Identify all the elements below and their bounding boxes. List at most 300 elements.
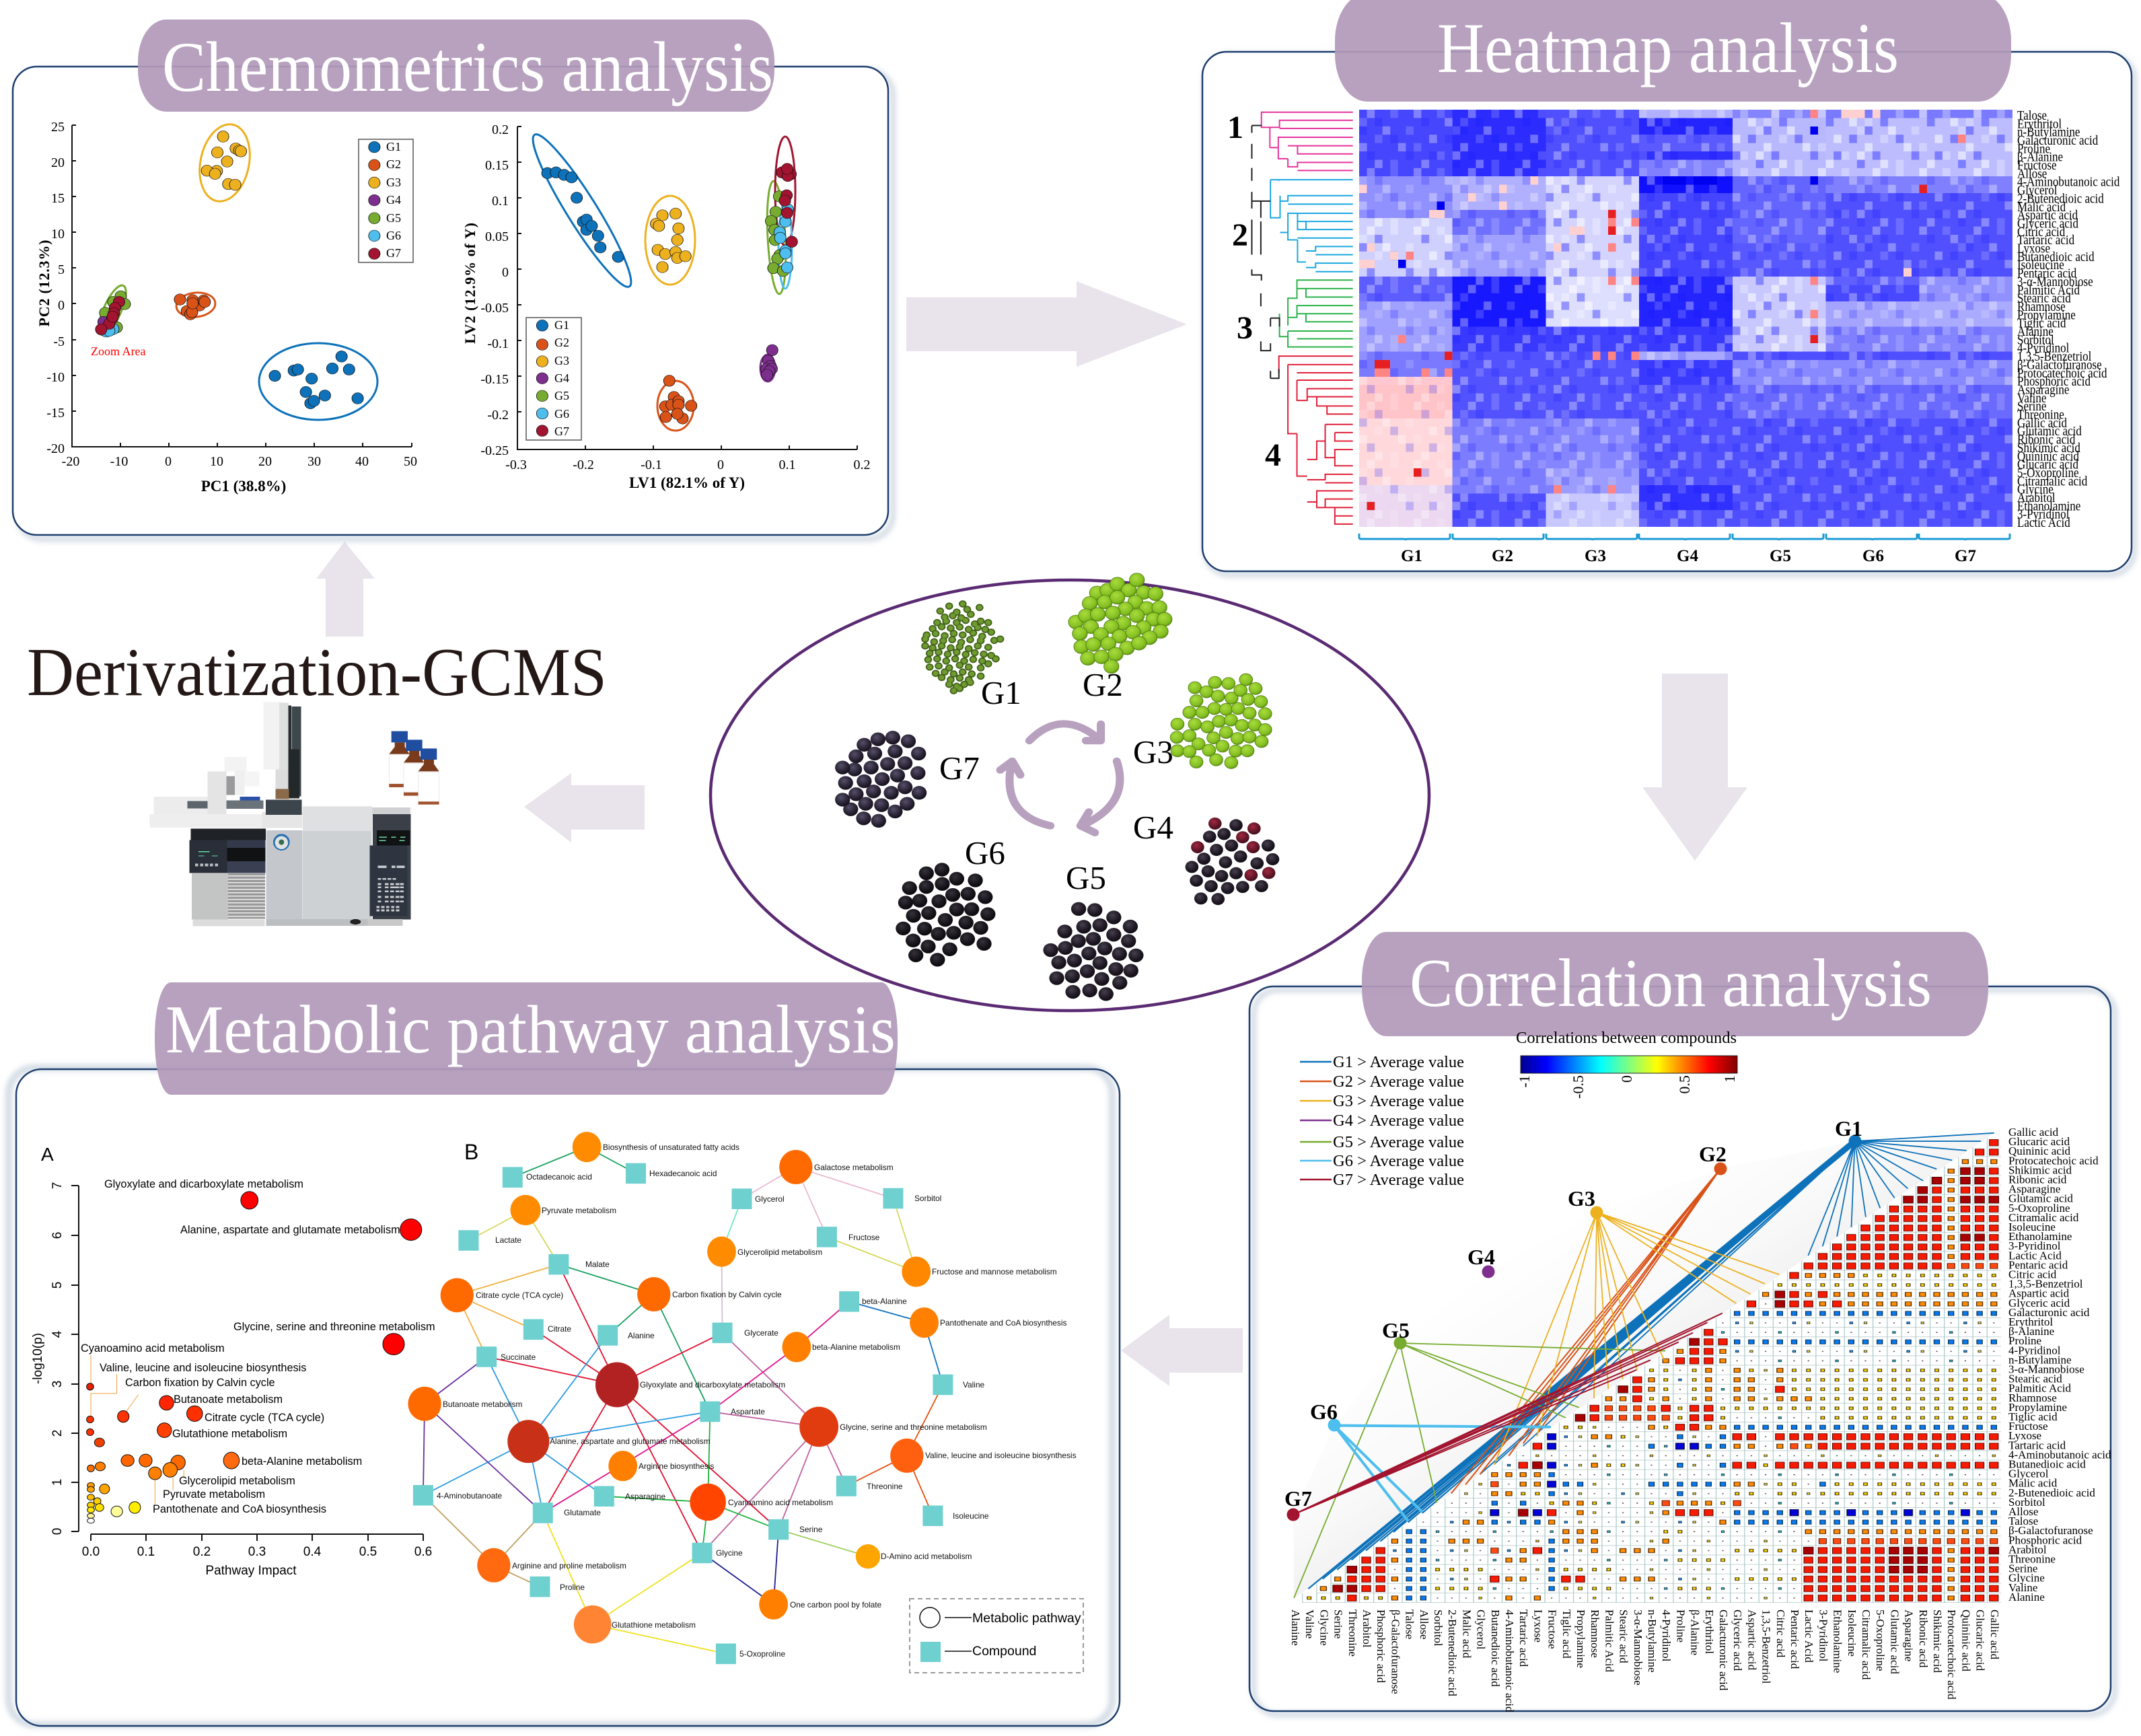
group labels: G1 (1401, 547, 1422, 565)
compound labels: Glucaric acid (2017, 457, 2079, 472)
network labels: Threonine (867, 1482, 903, 1491)
compound labels: 3-Pyridinol (2017, 507, 2069, 522)
matrix column labels: Galacturonic acid (1717, 1610, 1730, 1691)
network labels: Hexadecanoic acid (649, 1169, 717, 1178)
matrix column labels: Proline (1674, 1610, 1687, 1642)
chart A: pathway impact bubble plot: Butanoate metabolism (174, 1394, 283, 1406)
group labels: G5 (1770, 547, 1791, 565)
matrix row labels: β-Alanine (2008, 1325, 2054, 1338)
compound labels: Butanedioic acid (2017, 250, 2095, 264)
matrix column labels: Serine (1332, 1610, 1345, 1638)
compound labels: 4-Pyridinol (2017, 341, 2069, 356)
matrix column labels: Rhamnose (1589, 1610, 1601, 1658)
compound labels: Alanine (2017, 324, 2054, 339)
PLS-DA score plot: -0.05 (480, 301, 509, 316)
matrix column labels: Ethanolamine (1831, 1610, 1844, 1673)
legend: PLS-DA groups (526, 318, 581, 440)
legend: PLS-DA groups: G6 (554, 407, 569, 421)
cluster numbers: 4 (1265, 437, 1281, 473)
arrow: heatmap to correlation (1642, 674, 1747, 861)
compound labels: 4-Aminobutanoic acid (2017, 175, 2120, 190)
chart A: pathway impact bubble plot: Citrate cycle (TCA cycle) (205, 1412, 324, 1424)
heading pill: chemometrics: Chemometrics analysis (162, 28, 773, 106)
matrix row labels: 4-Aminobutanoic acid (2008, 1448, 2111, 1461)
matrix row labels: β-Galactofuranose (2008, 1524, 2093, 1537)
matrix column labels: Isoleucine (1846, 1610, 1858, 1657)
PLS-DA score plot: 0.15 (485, 158, 509, 173)
matrix row labels: Pentaric acid (2008, 1258, 2068, 1271)
PCA score plot: 10 (210, 454, 223, 469)
network labels: Malate (585, 1260, 610, 1269)
matrix column labels: Pentaric acid (1788, 1610, 1801, 1669)
chart A: pathway impact bubble plot: Alanine, aspartate and glutamate metabolism (180, 1224, 400, 1236)
PCA score plot: 40 (355, 454, 369, 469)
correlation colour bar: Correlations between compounds (1516, 1029, 1737, 1047)
chart A: pathway impact bubble plot: beta-Alanine metabolism (242, 1455, 362, 1468)
network labels: Glycerate (744, 1328, 778, 1338)
compound labels: Citric acid (2017, 225, 2066, 240)
PCA score plot: 25 (51, 120, 65, 135)
matrix row labels: Glycine (2008, 1572, 2045, 1585)
PCA score plot: 20 (51, 155, 65, 170)
chart A: pathway impact bubble plot: Cyanoamino acid metabolism (81, 1342, 225, 1354)
compound labels: Palmitic Acid (2017, 283, 2080, 298)
network legend (910, 1599, 1083, 1673)
matrix row labels: Glyceric acid (2008, 1297, 2070, 1309)
matrix column labels: Lactic Acid (1803, 1610, 1815, 1663)
matrix column labels: Aspartic acid (1745, 1610, 1758, 1671)
correlation colour bar: -1 (1516, 1075, 1533, 1087)
network labels: Proline (560, 1583, 585, 1592)
matrix column labels: Shikimic acid (1931, 1610, 1944, 1673)
group labels: G7 (939, 750, 980, 787)
matrix column labels: 4-Aminobutanoic acid (1503, 1610, 1516, 1712)
matrix column labels: Protocatechoic acid (1945, 1610, 1958, 1700)
chart A: pathway impact bubble plot: 5 (50, 1282, 65, 1289)
network labels: Alanine (628, 1331, 655, 1340)
matrix column labels: Glutamic acid (1888, 1610, 1901, 1674)
heading pill: metabolic pathway (155, 982, 898, 1095)
line legend: G2 > Average value (1333, 1073, 1464, 1091)
group labels: G2 (1083, 666, 1123, 703)
compound labels: Valine (2017, 391, 2046, 406)
compound labels: Rhamnose (2017, 299, 2066, 314)
chart A: pathway impact bubble plot: Valine, leucine and isoleucine biosynthesis (100, 1362, 306, 1374)
compound labels: Shikimic acid (2017, 441, 2081, 456)
PLS-DA score plot: 0.1 (492, 194, 509, 209)
chart A: pathway impact bubble plot: -log10(p) (31, 1333, 45, 1384)
network labels: Cyanoamino acid metabolism (728, 1498, 833, 1507)
arrow: GCMS to chemometrics (316, 542, 375, 637)
matrix row labels: Fructose (2008, 1420, 2048, 1433)
panel: heatmap analysis (1202, 0, 2134, 575)
matrix column labels: Glycine (1317, 1610, 1330, 1646)
network labels: beta-Alanine metabolism (812, 1342, 900, 1352)
PCA score plot (36, 120, 417, 495)
PCA score plot: -5 (53, 334, 65, 349)
chart B: metabolic network: B (464, 1140, 478, 1164)
PLS-DA score plot: -0.25 (480, 443, 509, 458)
berries G6 (896, 863, 995, 967)
group labels: G6 (1862, 547, 1884, 565)
PCA score plot: 10 (51, 227, 65, 242)
group labels: G4 (1677, 547, 1698, 565)
group labels: G3 (1133, 733, 1173, 770)
chart A: pathway impact bubble plot: 0.6 (414, 1545, 432, 1559)
legend: PCA groups: G1 (386, 140, 401, 153)
matrix column labels: Tartaric acid (1517, 1610, 1530, 1667)
matrix row labels: Quininic acid (2008, 1145, 2071, 1157)
matrix column labels: Talose (1404, 1610, 1416, 1639)
network labels: Fructose (848, 1233, 880, 1242)
group nodes: G5 (1382, 1318, 1410, 1342)
matrix column labels: Allose (1418, 1610, 1430, 1639)
group labels: G4 (1133, 809, 1173, 846)
matrix row labels: Shikimic acid (2008, 1163, 2072, 1176)
network labels: Valine, leucine and isoleucine biosynthesis (925, 1451, 1077, 1460)
matrix row labels: Lactic Acid (2008, 1249, 2062, 1262)
compound labels: 5-Oxoproline (2017, 466, 2079, 480)
network labels: D-Amino acid metabolism (881, 1552, 972, 1561)
group labels: G6 (965, 834, 1005, 871)
matrix column labels: Asparagine (1903, 1610, 1916, 1661)
chart A: pathway impact bubble plot: Carbon fixation by Calvin cycle (125, 1377, 275, 1389)
group nodes: G3 (1568, 1186, 1595, 1210)
compound labels: Stearic acid (2017, 291, 2071, 306)
cluster numbers: 1 (1227, 110, 1243, 145)
network labels: Aspartate (731, 1407, 765, 1416)
matrix row labels: Sorbitol (2008, 1496, 2045, 1509)
G7 lines (1293, 1313, 1722, 1515)
chart A: pathway impact bubble plot: 0.0 (82, 1545, 100, 1559)
compound labels: Tiglic acid (2017, 316, 2066, 331)
group nodes: G1 (1835, 1116, 1862, 1141)
chart A: pathway impact bubble plot: 0.3 (248, 1545, 266, 1559)
PLS-DA score plot: -0.1 (641, 458, 662, 472)
line legend: G3 > Average value (1333, 1092, 1464, 1110)
network labels: Lactate (495, 1235, 521, 1245)
PCA score plot: -10 (110, 454, 128, 469)
PCA score plot: 30 (307, 454, 321, 469)
legend: PCA groups: G4 (386, 193, 401, 207)
matrix row labels: Talose (2008, 1515, 2038, 1527)
matrix column labels: Tiglic acid (1560, 1610, 1573, 1659)
PCA score plot: -20 (62, 454, 79, 469)
line legend: G6 > Average value (1333, 1152, 1464, 1170)
network labels: Arginine biosynthesis (639, 1461, 714, 1471)
matrix row labels: Lyxose (2008, 1429, 2041, 1442)
compound labels: n-Butylamine (2017, 124, 2080, 140)
matrix column labels: 3-Pyridinol (1817, 1610, 1829, 1662)
cluster numbers: 3 (1237, 310, 1253, 346)
chart A: pathway impact bubble plot: 4 (50, 1330, 65, 1338)
network labels: Citrate cycle (TCA cycle) (476, 1291, 563, 1300)
matrix column labels: Butanedioic acid (1489, 1610, 1502, 1687)
compound labels: Ribonic acid (2017, 432, 2076, 447)
compound labels: Gallic acid (2017, 416, 2068, 431)
network labels: Valine (963, 1380, 985, 1389)
chart A: pathway impact bubble plot: 0.4 (303, 1545, 322, 1559)
compound labels: Arabitol (2017, 491, 2056, 505)
chart A: pathway impact bubble plot: Glyoxylate and dicarboxylate metabolism (104, 1178, 303, 1190)
matrix column labels: Phosphoric acid (1375, 1610, 1387, 1684)
compound labels: Phosphoric acid (2017, 374, 2091, 390)
network labels: Butanoate metabolism (443, 1400, 522, 1409)
PLS-DA score plot: -0.1 (487, 336, 509, 351)
matrix column labels: Sorbitol (1432, 1610, 1445, 1647)
network labels: Glycerol (755, 1194, 785, 1204)
chart A: pathway impact bubble plot: 1 (50, 1479, 65, 1486)
compound labels: Lactic Acid (2017, 515, 2070, 530)
network labels: Serine (799, 1525, 823, 1534)
heading pill: heatmap: Heatmap analysis (1437, 9, 1899, 87)
PCA score plot: PC2 (12.3%) (36, 240, 52, 327)
chart A: pathway impact bubble plot (31, 1144, 435, 1578)
matrix column labels: Glycerol (1475, 1610, 1488, 1650)
cluster numbers: 2 (1232, 217, 1248, 253)
network labels: Fructose and mannose metabolism (932, 1267, 1057, 1276)
chart A: pathway impact bubble plot: Glycerolipid metabolism (179, 1475, 295, 1487)
compound labels: β-Galactofuranose (2017, 357, 2102, 373)
compound labels: Asparagine (2017, 382, 2069, 398)
G6 lines (1334, 1426, 1551, 1521)
berries G1 (925, 604, 1001, 690)
matrix row labels: Tiglic acid (2008, 1410, 2058, 1423)
matrix row labels: 3-Pyridinol (2008, 1239, 2061, 1252)
legend: PLS-DA groups: G4 (554, 371, 569, 385)
group brackets (1359, 534, 2010, 540)
compound labels: Glutamic acid (2017, 424, 2082, 439)
compound labels: Galacturonic acid (2017, 133, 2099, 148)
chart A: pathway impact bubble plot: 0.5 (359, 1545, 377, 1559)
network labels: Carbon fixation by Calvin cycle (672, 1290, 782, 1299)
matrix column labels: Glucaric acid (1974, 1610, 1987, 1671)
matrix row labels: Isoleucine (2008, 1221, 2056, 1233)
network labels: 4-Aminobutanoate (437, 1491, 503, 1500)
compound labels: Erythritol (2017, 116, 2062, 132)
PLS-DA score plot: LV2 (12.9% of Y) (462, 223, 478, 344)
compound labels: Citramalic acid (2017, 474, 2088, 489)
G3 lines (1494, 1213, 1780, 1465)
PLS-DA score plot: -0.2 (573, 458, 594, 472)
matrix row labels: 2-Butenedioic acid (2008, 1486, 2095, 1499)
network labels: One carbon pool by folate (790, 1600, 882, 1610)
matrix column labels: Malic acid (1460, 1610, 1473, 1659)
matrix row labels: n-Butylamine (2008, 1353, 2071, 1366)
berries G5 (1043, 902, 1144, 1001)
matrix column labels: Lyxose (1531, 1610, 1544, 1642)
PCA score plot: -15 (46, 406, 65, 421)
matrix column labels: 2-Butenedioic acid (1446, 1610, 1459, 1696)
matrix row labels: Valine (2008, 1581, 2037, 1594)
matrix row labels: 1,3,5-Benzetriol (2008, 1278, 2083, 1291)
group nodes: G2 (1699, 1142, 1727, 1166)
chart A: pathway impact bubble plot: 0.2 (193, 1545, 211, 1559)
group-to-metabolite lines (1293, 1133, 1994, 1598)
legend: PCA groups: G3 (386, 176, 401, 189)
chart A: pathway impact bubble plot: A (41, 1144, 54, 1165)
matrix row labels: 4-Pyridinol (2008, 1344, 2061, 1357)
group nodes (1284, 1116, 1862, 1521)
berries G2 (1068, 573, 1172, 674)
PLS-DA score plot: -0.15 (480, 372, 509, 387)
matrix column labels: Quininic acid (1959, 1610, 1972, 1672)
matrix column labels: Gallic acid (1988, 1610, 2001, 1660)
group labels: G7 (1955, 547, 1976, 565)
group labels: G1 (981, 674, 1021, 711)
compound labels: 1,3,5-Benzetriol (2017, 349, 2091, 364)
PLS-DA score plot: -0.2 (487, 408, 509, 423)
network labels: Asparagine (625, 1492, 666, 1501)
icon: sample vials (389, 731, 439, 805)
PLS-DA score plot: LV1 (82.1% of Y) (629, 474, 745, 491)
matrix column labels: Fructose (1546, 1610, 1559, 1649)
correlation colour bar: 0.5 (1676, 1075, 1693, 1094)
arrow: correlation to pathway (1121, 1315, 1243, 1386)
legend: PCA groups: G5 (386, 211, 401, 225)
matrix row labels: Propylamine (2008, 1401, 2067, 1414)
matrix row labels: Glutamic acid (2008, 1192, 2073, 1205)
PLS-DA score plot: 0 (717, 458, 724, 472)
line legend (1300, 1053, 1464, 1189)
matrix column labels: Arabitol (1360, 1610, 1373, 1648)
group nodes: G7 (1284, 1486, 1312, 1511)
line legend: G7 > Average value (1333, 1171, 1464, 1189)
correlation colour bar (1516, 1029, 1738, 1099)
matrix row labels: Aspartic acid (2008, 1287, 2070, 1300)
matrix column labels: Propylamine (1574, 1610, 1587, 1668)
network labels: beta-Alanine (862, 1297, 907, 1306)
matrix column labels: Alanine (1289, 1610, 1302, 1646)
correlation colour bar: 0 (1618, 1075, 1635, 1083)
network labels (437, 1143, 1077, 1659)
matrix row labels: Palmitic Acid (2008, 1382, 2072, 1395)
PCA score plot: 15 (51, 191, 65, 206)
correlation colour bar: 1 (1721, 1075, 1738, 1083)
chart B: metabolic network (408, 1132, 1083, 1673)
group labels (1401, 547, 1976, 565)
compound labels: Pentaric acid (2017, 266, 2077, 281)
network labels: Glycerolipid metabolism (737, 1247, 822, 1257)
compound labels: Glyceric acid (2017, 216, 2079, 231)
chart A: pathway impact bubble plot: 0.1 (137, 1545, 155, 1559)
matrix column labels: Erythritol (1703, 1610, 1716, 1654)
network edges (423, 1147, 943, 1654)
matrix column labels: Glyceric acid (1731, 1610, 1744, 1671)
group nodes: G6 (1310, 1400, 1338, 1424)
matrix row labels: Alanine (2008, 1591, 2045, 1603)
matrix row labels: Gallic acid (2008, 1126, 2059, 1138)
network labels: Glutathione metabolism (612, 1620, 696, 1630)
berries G4 (1186, 818, 1279, 905)
legend: PLS-DA groups: G1 (554, 318, 569, 332)
matrix column labels: Threonine (1346, 1610, 1359, 1657)
arrow: samples to GCMS (524, 773, 645, 842)
network labels: Galactose metabolism (814, 1163, 894, 1172)
legend: PCA groups (359, 139, 413, 262)
chart A: pathway impact bubble plot: Glycine, serine and threonine metabolism (233, 1321, 435, 1333)
legend: PCA groups: G6 (386, 229, 401, 242)
legend: PLS-DA groups: G3 (554, 354, 569, 367)
compound labels: Protocatechoic acid (2017, 366, 2107, 381)
PCA score plot: 20 (258, 454, 272, 469)
compound labels: Aspartic acid (2017, 208, 2078, 223)
compound labels: Ethanolamine (2017, 499, 2080, 514)
group labels (939, 666, 1173, 896)
network labels: Arginine and proline metabolism (512, 1561, 626, 1570)
PCA score plot: 5 (58, 262, 65, 277)
faint network background (1293, 1133, 1994, 1598)
PLS-DA score plot: -0.3 (505, 458, 527, 472)
matrix column labels: Valine (1303, 1610, 1316, 1638)
line legend: G5 > Average value (1333, 1133, 1464, 1151)
line legend: G1 > Average value (1333, 1053, 1464, 1071)
heading pill: correlation: Correlation analysis (1410, 945, 1932, 1021)
network labels: 5-Oxoproline (739, 1649, 785, 1659)
chart A: pathway impact bubble plot: Glutathione metabolism (172, 1428, 287, 1440)
PLS-DA score plot (462, 122, 871, 491)
group labels: G5 (1066, 859, 1106, 896)
network labels: Glycine (716, 1548, 743, 1558)
network compound nodes (413, 1163, 953, 1664)
matrix row labels: Arabitol (2008, 1543, 2047, 1556)
matrix column labels: Palmitic Acid (1603, 1610, 1616, 1673)
matrix column labels: Ribonic acid (1917, 1610, 1930, 1668)
G5 lines (1294, 1343, 1665, 1598)
matrix column labels: Citramalic acid (1860, 1610, 1873, 1680)
matrix column labels: β-Alanine (1689, 1610, 1702, 1655)
matrix row labels: Glycerol (2008, 1468, 2049, 1480)
network labels: Citrate (548, 1324, 571, 1334)
compound labels: Isoleucine (2017, 258, 2064, 273)
heading pill: heatmap (1335, 0, 2011, 102)
correlation matrix (1288, 1128, 2015, 1603)
compound labels: Proline (2017, 141, 2050, 157)
compound labels: Glycine (2017, 482, 2054, 497)
chart A: pathway impact bubble plot: Pyruvate metabolism (163, 1488, 265, 1500)
compound labels: Talose (2017, 108, 2047, 123)
legend: PLS-DA groups: G2 (554, 336, 569, 349)
compound labels: Allose (2017, 166, 2047, 182)
matrix row labels: Stearic acid (2008, 1373, 2062, 1385)
matrix column labels: Stearic acid (1618, 1610, 1630, 1663)
berries G7 (835, 731, 927, 828)
matrix row labels: Citramalic acid (2008, 1211, 2079, 1224)
chart A: pathway impact bubble plot: 2 (50, 1430, 65, 1437)
compound labels: 3-α-Mannobiose (2017, 275, 2093, 289)
matrix row labels: Protocatechoic acid (2008, 1154, 2099, 1167)
PCA score plot: 50 (404, 454, 417, 469)
matrix row labels: 5-Oxoproline (2008, 1202, 2070, 1215)
compound labels: Threonine (2017, 407, 2064, 423)
line legend: G4 > Average value (1333, 1112, 1464, 1130)
compound labels: Propylamine (2017, 308, 2076, 323)
matrix row labels: Tartaric acid (2008, 1439, 2066, 1451)
network labels: Glycine, serine and threonine metabolism (840, 1422, 987, 1432)
matrix column labels: β-Galactofuranose (1389, 1610, 1402, 1694)
matrix row labels: Threonine (2008, 1553, 2056, 1565)
matrix column labels: 1,3,5-Benzetriol (1760, 1610, 1773, 1684)
panel: correlation analysis (1249, 932, 2115, 1714)
matrix row labels: Citric acid (2008, 1268, 2057, 1281)
network labels: Biosynthesis of unsaturated fatty acids (603, 1143, 739, 1152)
PCA score plot: -20 (46, 441, 65, 456)
network labels: Sorbitol (914, 1194, 941, 1203)
matrix row labels: Butanedioic acid (2008, 1458, 2086, 1471)
compound labels: Glycerol (2017, 183, 2057, 198)
matrix row labels: Malic acid (2008, 1477, 2058, 1490)
matrix column labels: 5-Oxoproline (1874, 1610, 1887, 1671)
